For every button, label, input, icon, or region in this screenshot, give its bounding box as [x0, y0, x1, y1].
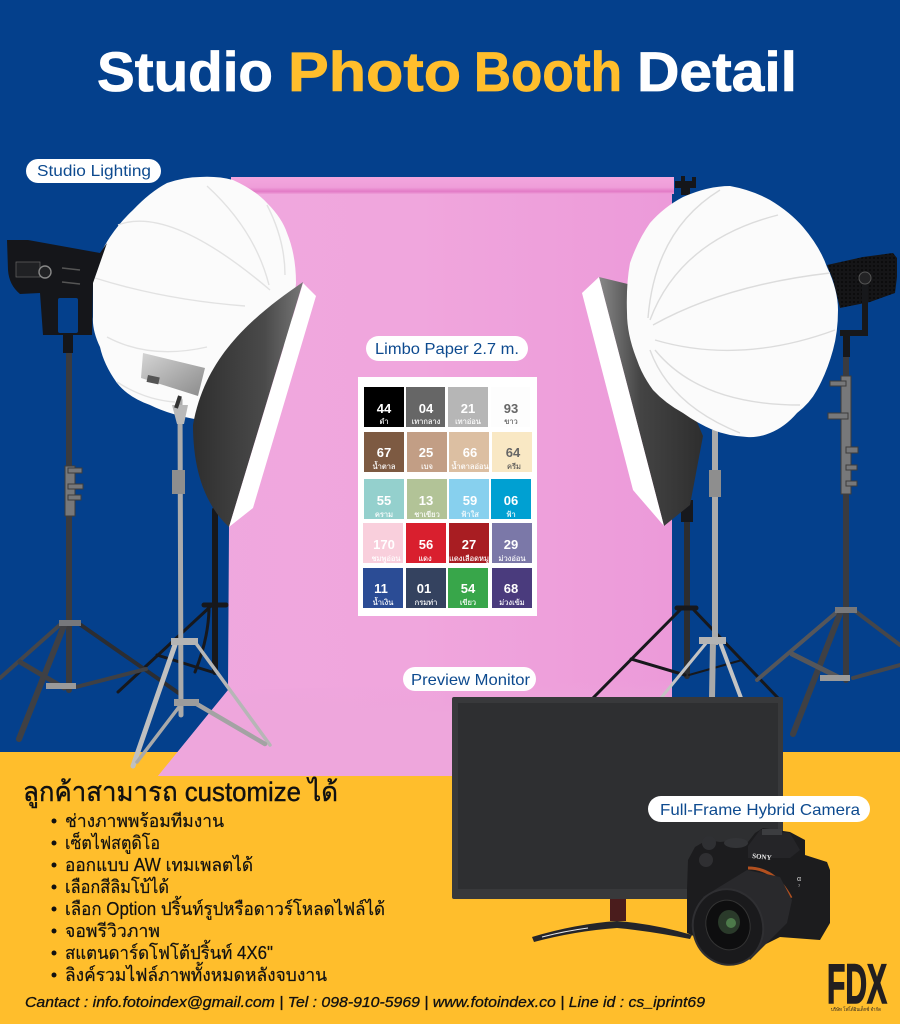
label: Preview Monitor [403, 667, 536, 691]
swatch 66: 66 [463, 445, 477, 460]
swatch 93: ขาว [504, 417, 518, 426]
colour swatch panel [358, 377, 537, 616]
title: Photo [288, 40, 461, 103]
swatch 59: ฟ้าใส [461, 510, 479, 519]
camera: α [797, 876, 801, 883]
swatch 68: 68 [504, 581, 518, 596]
swatch 29: ม่วงอ่อน [499, 554, 525, 563]
swatch 59: 59 [463, 493, 477, 508]
swatch 44: ดำ [379, 417, 389, 426]
swatch 54: 54 [461, 581, 476, 596]
swatch 44: 44 [377, 401, 392, 416]
title [97, 40, 797, 103]
swatch 55: คราม [375, 510, 393, 519]
swatch 93 [491, 387, 530, 427]
back stand left (black) [118, 510, 226, 692]
swatch 13 [407, 479, 447, 519]
yellow footer band [0, 752, 900, 1024]
item 3: ออกแบบ AW เทมเพลตได้ [65, 854, 253, 875]
swatch 01: กรมท่า [415, 598, 437, 607]
item 5: เลือก Option ปริ้นท์รูปหรือดาวร์โหลดไฟล์ได้ [65, 896, 385, 920]
swatch 06: ฟ้า [506, 510, 516, 519]
swatch 66 [449, 432, 489, 472]
FDX logo: บริษัท โฟโต้อินเด็กซ์ จำกัด [831, 1005, 881, 1013]
title: Booth [474, 40, 622, 103]
item 8: ลิงค์รวมไฟล์ภาพทั้งหมดหลังจบงาน [65, 962, 327, 985]
item 4: เลือกสีลิมโบ้ได้ [65, 876, 169, 897]
swatch 29 [492, 523, 532, 563]
left studio light stand [0, 352, 180, 739]
camera: 7 [798, 883, 801, 888]
swatch 67: 67 [377, 445, 391, 460]
swatch 56: 56 [419, 537, 433, 552]
preview monitor [452, 697, 783, 942]
swatch 25: เบจ [421, 462, 433, 471]
label: Full-Frame Hybrid Camera: Full-Frame Hybrid Camera [660, 802, 860, 819]
pink limbo backdrop paper [158, 190, 672, 776]
swatch 64 [492, 432, 532, 472]
heading: customize: ลูกค้าสามารถ customize ได้ [23, 777, 338, 808]
title: Detail [637, 40, 797, 103]
swatch 04: เทากลาง [412, 417, 441, 426]
title: Studio [97, 40, 273, 103]
swatch 67 [364, 432, 404, 472]
right studio light head [827, 253, 897, 357]
item 2: เซ็ตไฟสตูดิโอ [65, 831, 160, 854]
label: Full-Frame Hybrid Camera [648, 796, 870, 822]
swatch 170: 170 [373, 537, 395, 552]
swatch 68 [492, 568, 532, 608]
roll clamp [675, 176, 696, 195]
left chrome stand [133, 400, 270, 766]
swatch 170 [363, 523, 403, 563]
swatch 27: 27 [462, 537, 476, 552]
swatch 27: แดงเลือดหมู [449, 554, 489, 563]
left softbox [193, 282, 316, 527]
swatch 44 [364, 387, 404, 427]
swatch 27 [449, 523, 489, 563]
label: Limbo Paper [366, 336, 528, 361]
swatch 21 [448, 387, 488, 427]
swatch 64: ครีม [507, 462, 521, 471]
item 2 [52, 831, 160, 854]
right studio light stand [757, 352, 900, 734]
right lantern softbox [627, 186, 838, 437]
backdrop roll [231, 177, 674, 194]
camera [684, 828, 830, 973]
black stand legs over the paper [593, 608, 685, 698]
left studio light head [7, 240, 107, 353]
swatch 59 [449, 479, 489, 519]
swatch 55: 55 [377, 493, 391, 508]
item 6: จอพรีวิวภาพ [65, 921, 160, 941]
swatch 04: 04 [419, 401, 434, 416]
label: Studio Lighting: Studio Lighting [37, 163, 151, 180]
contact line: Cantact : info.fotoindex@gmail.com | Tel : 098-910-5969 | www.fotoindex.co | Line id : cs_iprint69 [25, 994, 706, 1011]
swatch 06 [491, 479, 531, 519]
label: Studio Lighting [26, 159, 161, 183]
swatch 11: น้ำเงิน [373, 597, 393, 607]
label: Preview Monitor: Preview Monitor [411, 672, 531, 689]
swatch 170: ชมพูอ่อน [371, 554, 401, 563]
swatch 13: ชาเขียว [414, 510, 440, 519]
swatch 54: เขียว [460, 598, 476, 607]
swatch 06: 06 [504, 493, 518, 508]
swatch 25 [407, 432, 447, 472]
swatch 54 [448, 568, 488, 608]
swatch 68: ม่วงเข้ม [499, 598, 525, 607]
item 1: ช่างภาพพร้อมทีมงาน [65, 811, 224, 831]
bullet list [52, 811, 385, 985]
back stand right (black) [677, 500, 778, 698]
swatch 25: 25 [419, 445, 433, 460]
swatch 01 [406, 568, 446, 608]
swatch 29: 29 [504, 537, 518, 552]
swatch 01: 01 [417, 581, 431, 596]
label: Limbo Paper: Limbo Paper 2.7 m. [375, 341, 519, 358]
item 7: สแตนดาร์ดโฟโต้ปริ้นท์ 4X6" [65, 940, 273, 963]
swatch 21: 21 [461, 401, 475, 416]
swatch 55 [364, 479, 404, 519]
swatch 93: 93 [504, 401, 518, 416]
swatch 04 [406, 387, 445, 427]
swatch 56: แดง [418, 554, 432, 563]
left strobe head [141, 353, 205, 424]
navy background [0, 0, 900, 753]
swatch 11 [363, 568, 403, 608]
camera: SONY [752, 852, 772, 862]
swatch 56 [406, 523, 446, 563]
swatch 64: 64 [506, 445, 521, 460]
swatch 67: น้ำตาล [372, 461, 396, 471]
swatch 66: น้ำตาลอ่อน [451, 461, 489, 471]
floor sweep shading [158, 680, 672, 776]
right softbox and stand [582, 277, 741, 698]
swatch 21: เทาอ่อน [455, 417, 481, 426]
swatch 11: 11 [374, 581, 388, 596]
swatch 13: 13 [419, 493, 433, 508]
left lantern softbox [93, 177, 296, 420]
